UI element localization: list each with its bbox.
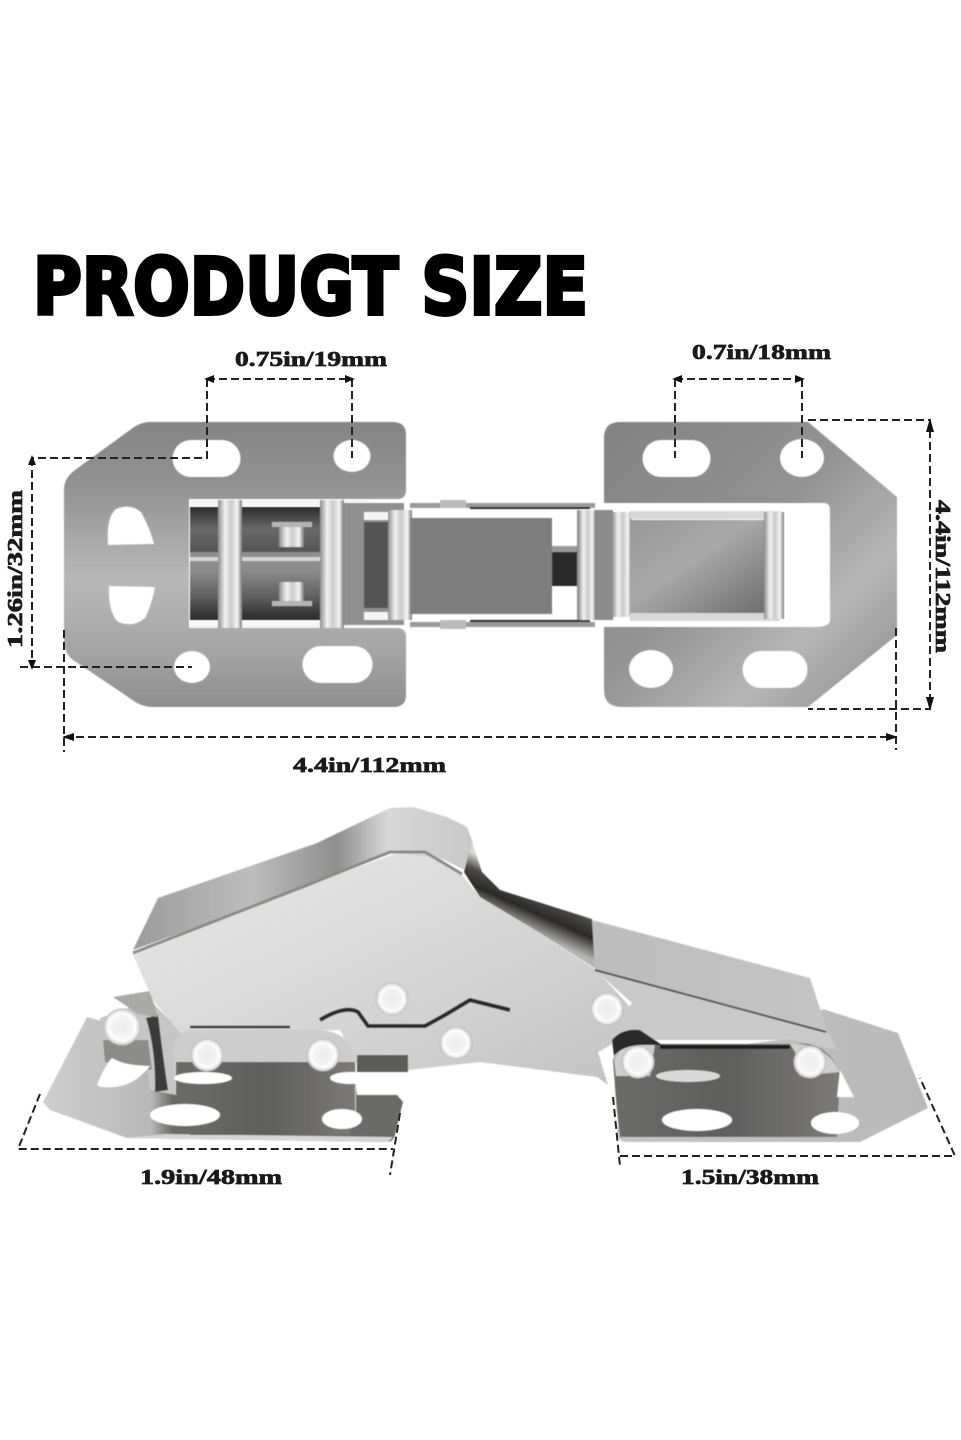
- hole cutouts: [97, 1058, 859, 1134]
- left link dark: [176, 1062, 355, 1135]
- dimension: 0.7in/18mm: 0.7in/18mm: [692, 340, 832, 364]
- dimension: 1.26in/32mm: 1.26in/32mm: [3, 489, 27, 648]
- dark tube: [464, 842, 596, 969]
- top view hinge: [64, 422, 897, 707]
- main body: [133, 852, 635, 1085]
- dimension: overall height 4.4in/112mm: 4.4in/112mm: [931, 500, 955, 654]
- left link plate: [173, 1030, 356, 1120]
- dimension: overall length 4.4in/112mm: 4.4in/112mm: [293, 753, 447, 777]
- right base plate: [613, 1009, 928, 1142]
- left mounting plate: [64, 422, 406, 707]
- 3D view hinge: [43, 807, 928, 1142]
- fold highlight: [133, 852, 462, 953]
- top fold panel: [133, 807, 473, 950]
- jagged seam: [320, 1000, 510, 1026]
- rivets: [104, 983, 826, 1078]
- dimension: 0.75in/19mm: 0.75in/19mm: [235, 347, 388, 371]
- dimension: 1.5in/38mm: 1.5in/38mm: [681, 1165, 820, 1189]
- right link plate: [613, 1044, 840, 1137]
- dimension: 0.7in/18mm: [672, 340, 832, 458]
- dimension: 1.9in/48mm: 1.9in/48mm: [140, 1165, 283, 1189]
- arm lower: [595, 970, 838, 1052]
- shadow under body: [357, 1055, 408, 1072]
- dimension: 1.5in/38mm: [613, 1078, 955, 1189]
- right mounting plate: [604, 422, 897, 707]
- hinge mechanism: [190, 500, 784, 629]
- dimension: overall length 4.4in/112mm: [62, 628, 898, 777]
- arm right: [592, 920, 828, 1033]
- dimension: 1.9in/48mm: [18, 1094, 400, 1189]
- dimension: 1.26in/32mm: [3, 455, 192, 670]
- left base plate: [43, 1017, 403, 1142]
- dimension: overall height 4.4in/112mm: [808, 418, 955, 711]
- left hinge post: [100, 991, 182, 1095]
- title: PRODUGT SIZE: [33, 243, 588, 333]
- light strip along left plate bottom: [127, 1134, 393, 1142]
- dimension: 0.75in/19mm: [32, 347, 388, 458]
